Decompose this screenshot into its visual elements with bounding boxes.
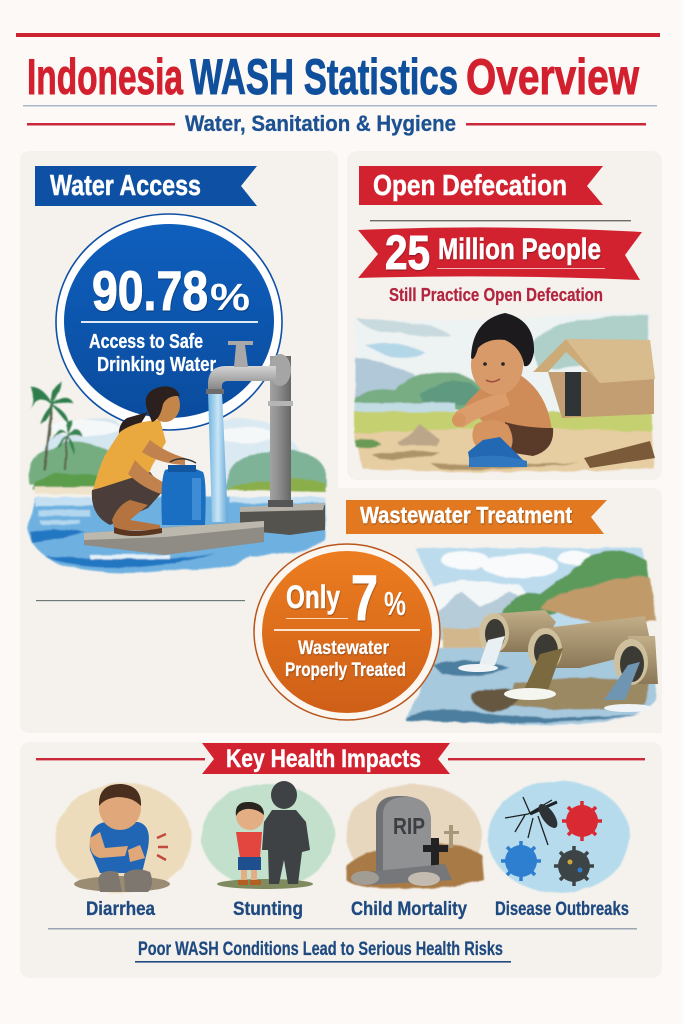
heading ribbon: key health impacts: Key Health Impacts	[226, 745, 421, 773]
icon: stunting	[201, 781, 335, 889]
valve	[228, 341, 253, 367]
title: WASH Statistics	[190, 49, 458, 105]
water jug	[161, 459, 206, 525]
divider line	[36, 600, 245, 601]
stat circle: only 7%: %	[384, 585, 406, 622]
caption: Still Practice Open Defecation	[389, 285, 603, 305]
tap base block	[240, 505, 325, 535]
stone platform	[84, 521, 264, 555]
labels: Stunting	[233, 899, 303, 920]
gravestone inscription: RIP	[393, 813, 425, 839]
stat circle: 90.78%: 90.78	[92, 259, 208, 322]
woman	[92, 386, 185, 536]
heading ribbon: water access	[35, 166, 257, 206]
stat circle: 90.78%: Drinking Water	[97, 354, 216, 376]
illustration: woman collecting water at tap	[28, 341, 327, 573]
labels	[86, 899, 629, 920]
stat circle: only 7%: 7	[351, 562, 378, 634]
tap spout	[208, 366, 276, 390]
icon: disease outbreaks	[488, 781, 630, 893]
log	[584, 441, 655, 468]
title: Indonesia	[27, 49, 184, 105]
illustration: discharge pipes	[405, 548, 658, 725]
outflows	[480, 636, 505, 666]
icon: diarrhea	[55, 783, 191, 893]
labels: Disease Outbreaks	[495, 899, 629, 920]
footer message: Poor WASH Conditions Lead to Serious Health Risks	[138, 939, 503, 960]
virus: dark	[554, 846, 594, 886]
stat circle: only 7%: Properly Treated	[285, 660, 406, 681]
stat ribbon: 25 million people	[358, 227, 642, 280]
heading ribbon: open defecation: Open Defecation	[373, 170, 567, 202]
stat circle: only 7%	[254, 544, 440, 720]
mosquito	[505, 797, 557, 845]
stat ribbon: 25 million people: Million People	[438, 233, 601, 266]
subtitle: Water, Sanitation & Hygiene	[185, 111, 456, 136]
heading ribbon: wastewater treatment: Wastewater Treatment	[360, 502, 572, 528]
stat circle: only 7%: Only	[286, 579, 340, 615]
icon: child mortality	[346, 784, 484, 889]
stat circle: 90.78%: Access to Safe	[89, 331, 203, 353]
panel: water access	[20, 151, 338, 733]
panel: key health impacts	[20, 742, 662, 978]
title: Overview	[466, 49, 639, 105]
heading ribbon: water access: Water Access	[50, 170, 201, 202]
header	[16, 33, 660, 136]
stat circle: 90.78%: %	[210, 277, 250, 319]
stat circle: 90.78%	[56, 214, 282, 430]
virus: blue	[501, 841, 541, 881]
panel: wastewater treatment	[254, 488, 662, 733]
hut	[533, 339, 655, 418]
pipes	[498, 610, 556, 652]
stat ribbon: 25 million people: 25	[385, 227, 430, 280]
panel: open defecation	[347, 151, 662, 480]
water stream	[208, 392, 228, 522]
virus: red	[562, 801, 602, 841]
illustration: boy squatting near hut	[355, 312, 655, 472]
labels: Diarrhea	[86, 899, 155, 920]
labels: Child Mortality	[351, 899, 467, 920]
boy	[452, 313, 553, 467]
stat circle: only 7%: Wastewater	[298, 638, 390, 659]
standpipe	[270, 356, 291, 506]
